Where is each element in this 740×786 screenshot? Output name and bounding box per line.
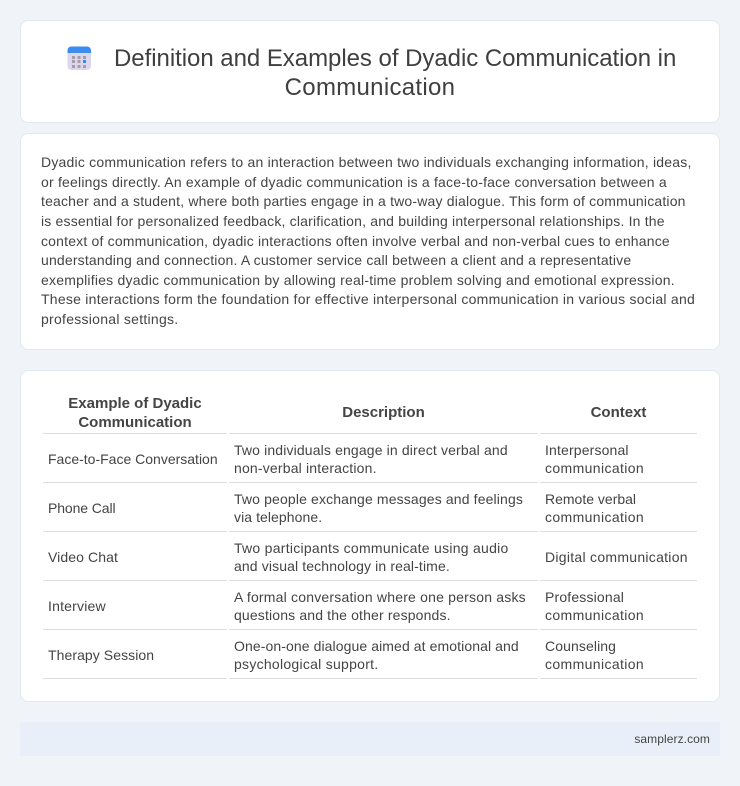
definition paragraph: professional settings. bbox=[41, 311, 178, 327]
definition paragraph: These interactions form the foundation for effective interpersonal communication in various social and bbox=[41, 291, 695, 307]
definition paragraph: Dyadic communication refers to an interaction between two individuals exchanging information, ideas, bbox=[41, 154, 692, 170]
table header: Context bbox=[591, 404, 646, 421]
definition paragraph: teacher and a student, where both parties engage in a two-way dialogue. This form of communication bbox=[41, 193, 686, 209]
definition paragraph: context of communication, dyadic interactions often involve verbal and non-verbal cues to enhance bbox=[41, 233, 670, 249]
table row: interview: questions and the other responds. bbox=[234, 607, 451, 623]
table row: face-to-face conversation bbox=[43, 442, 697, 483]
table row: face-to-face conversation: Two individuals engage in direct verbal and bbox=[234, 442, 508, 458]
table row: video chat: Video Chat bbox=[48, 549, 118, 565]
table row: therapy session: One-on-one dialogue aimed at emotional and bbox=[234, 638, 519, 654]
table row: interview: A formal conversation where one person asks bbox=[234, 589, 526, 605]
definition paragraph: is essential for personalized feedback, clarification, and building interpersonal relationships. In the bbox=[41, 213, 665, 229]
table row: phone call: Phone Call bbox=[48, 500, 116, 516]
panel: examples table bbox=[20, 370, 720, 702]
table row: phone call: Remote verbal bbox=[545, 491, 636, 507]
table row: therapy session bbox=[43, 638, 697, 679]
definition paragraph: exemplifies dyadic communication by allowing real-time problem solving and emotional expression. bbox=[41, 272, 675, 288]
table row: phone call: communication bbox=[545, 509, 644, 525]
table header: Example of Dyadic bbox=[68, 395, 202, 412]
table header bbox=[43, 395, 697, 434]
table header: Description bbox=[342, 404, 425, 421]
table row: face-to-face conversation: Face-to-Face Conversation bbox=[48, 451, 218, 467]
table row: interview: Professional bbox=[545, 589, 624, 605]
table row: interview bbox=[43, 589, 697, 630]
panel: definition text bbox=[20, 133, 720, 350]
table row: video chat: Two participants communicate using audio bbox=[234, 540, 509, 556]
definition paragraph bbox=[41, 154, 695, 327]
title bbox=[114, 45, 676, 101]
table row: therapy session: Therapy Session bbox=[48, 647, 154, 663]
icon: calendar bbox=[68, 46, 91, 70]
table row: video chat: and visual technology in real-time. bbox=[234, 558, 450, 574]
table row: phone call: via telephone. bbox=[234, 509, 322, 525]
table row: therapy session: Counseling bbox=[545, 638, 616, 654]
table row: face-to-face conversation: non-verbal interaction. bbox=[234, 460, 377, 476]
title: Communication bbox=[285, 74, 455, 101]
table row: video chat bbox=[43, 540, 697, 581]
footer source text: samplerz.com bbox=[634, 732, 710, 746]
table row: phone call bbox=[43, 491, 697, 532]
header panel bbox=[20, 20, 720, 123]
table row: video chat: Digital communication bbox=[545, 549, 688, 565]
definition paragraph: or feelings directly. An example of dyadic communication is a face-to-face conversation between a bbox=[41, 174, 667, 190]
table row: therapy session: psychological support. bbox=[234, 656, 378, 672]
definition paragraph: understanding and connection. A customer service call between a client and a representative bbox=[41, 252, 631, 268]
footer bar bbox=[20, 722, 720, 756]
table row: interview: communication bbox=[545, 607, 644, 623]
table row: face-to-face conversation: Interpersonal bbox=[545, 442, 629, 458]
table row: phone call: Two people exchange messages and feelings bbox=[234, 491, 523, 507]
table row: face-to-face conversation: communication bbox=[545, 460, 644, 476]
title: Definition and Examples of Dyadic Communication in bbox=[114, 45, 676, 72]
table header: Communication bbox=[78, 414, 192, 431]
table row: therapy session: communication bbox=[545, 656, 644, 672]
table row: interview: Interview bbox=[48, 598, 106, 614]
